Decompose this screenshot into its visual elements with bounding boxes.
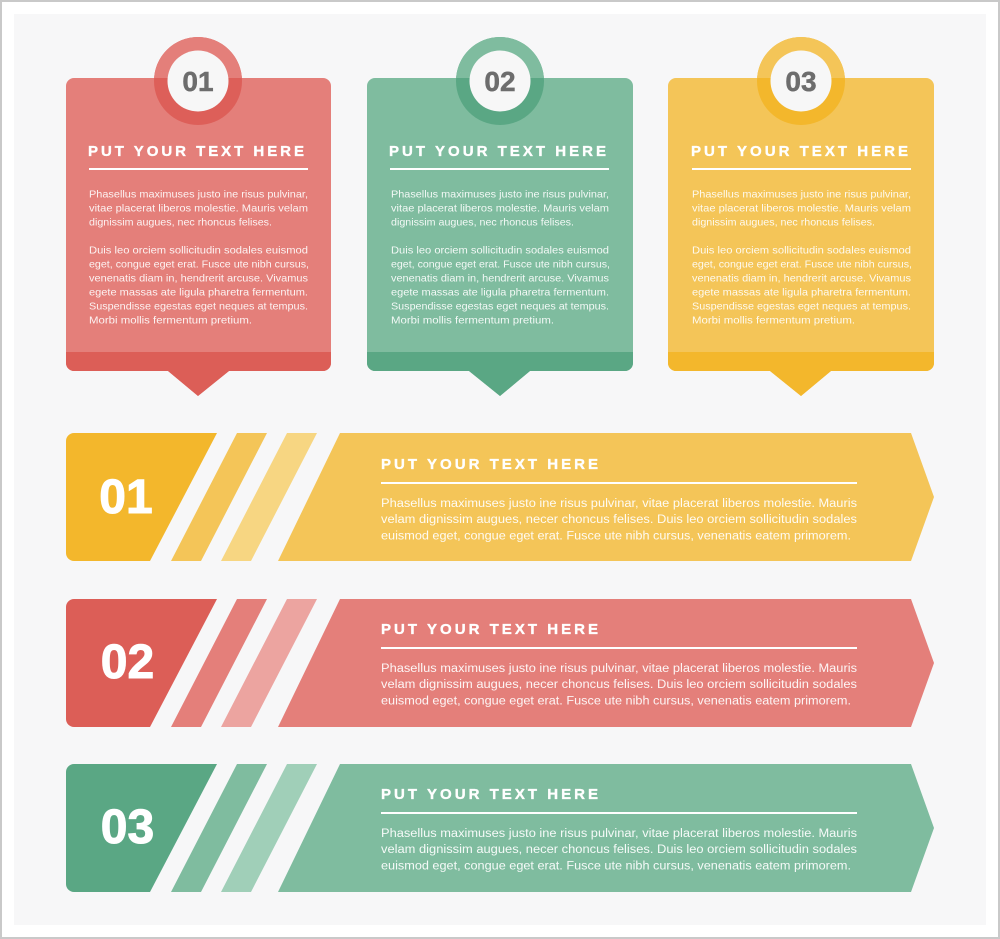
text block: card 01: Suspendisse egestas eget neques at tempus. [89,300,308,312]
panel: card 01 [66,37,331,396]
text block: card 02: venenatis diam in, hendrerit arcuse. Vivamus [391,272,609,284]
text block: card 02: eget, congue eget erat. Fusce ute nibh cursus, [391,258,610,270]
icon: number badge 03 [757,37,845,125]
text block: banner 01: Phasellus maximuses justo ine risus pulvinar, vitae placerat liberos molestie. Mauris [381,498,857,510]
text block: card 02: dignissim augues, nec rhoncus felises. [391,216,574,228]
heading: card 02: PUT YOUR TEXT HERE [389,143,606,160]
text block: banner 02: euismod eget, congue eget erat. Fusce ute nibh cursus, venenatis eatem primorem. [381,696,851,708]
slanted stripes 01 [171,433,317,561]
heading: banner 01: PUT YOUR TEXT HERE [381,456,598,473]
text block: card 03: venenatis diam in, hendrerit arcuse. Vivamus [692,272,911,284]
text block: card 02: vitae placerat liberos molestie. Mauris velam [391,202,609,214]
arrow 01 [278,433,934,561]
text block: card 02 [391,188,610,326]
slanted stripes 03 [171,764,317,892]
text block: banner 03: velam dignissim augues, necer choncus felises. Duis leo orciem sollicitudin sodales [381,844,857,856]
text block: card 01: Phasellus maximuses justo ine risus pulvinar, [89,188,308,200]
text block: card 01 [89,188,309,326]
number block 02 [66,599,217,727]
text block: card 01: venenatis diam in, hendrerit arcuse. Vivamus [89,272,308,284]
text block: card 03: eget, congue eget erat. Fusce ute nibh cursus, [692,258,912,270]
text block: card 01: Duis leo orciem sollicitudin sodales euismod [89,244,308,256]
text block: banner 02: velam dignissim augues, necer choncus felises. Duis leo orciem sollicitudin sodales [381,679,857,691]
text block: banner 03 [381,828,857,872]
text block: card 03: vitae placerat liberos molestie. Mauris velam [692,202,911,214]
icon: number badge 02 [456,37,544,125]
heading: banner 03: PUT YOUR TEXT HERE [381,786,598,803]
number block 03: 03 [101,801,154,854]
text block: banner 03: euismod eget, congue eget erat. Fusce ute nibh cursus, venenatis eatem primorem. [381,860,851,872]
panel: card 03 [668,37,934,396]
text block: card 01: vitae placerat liberos molestie. Mauris velam [89,202,308,214]
text block: card 03: Suspendisse egestas eget neques at tempus. [692,300,911,312]
text block: card 01: dignissim augues, nec rhoncus felises. [89,216,272,228]
panel: banner 02 [66,599,934,727]
text block: banner 01: velam dignissim augues, necer choncus felises. Duis leo orciem sollicitudin sodales [381,514,857,526]
text block: card 02: Duis leo orciem sollicitudin sodales euismod [391,244,609,256]
text block: card 03: Duis leo orciem sollicitudin sodales euismod [692,244,911,256]
icon: number badge 01: 01 [182,66,214,97]
number block 02: 02 [101,636,154,689]
text block: banner 02 [381,663,857,708]
text block: banner 03: Phasellus maximuses justo ine risus pulvinar, vitae placerat liberos molestie. Mauris [381,828,857,840]
icon: number badge 02: 02 [484,66,516,97]
icon: number badge 03: 03 [785,66,817,97]
arrow 03 [278,764,934,892]
text block: card 03: dignissim augues, nec rhoncus felises. [692,216,875,228]
text block: card 03 [692,188,912,326]
number block 01 [66,433,217,561]
text block: card 02: Suspendisse egestas eget neques at tempus. [391,300,609,312]
number block 01: 01 [99,471,153,524]
heading: card 03: PUT YOUR TEXT HERE [691,143,908,160]
text block: card 03: Phasellus maximuses justo ine risus pulvinar, [692,188,911,200]
panel: banner 01 [66,433,934,561]
icon: number badge 01 [154,37,242,125]
heading: card 01: PUT YOUR TEXT HERE [88,143,304,160]
text block: card 03: egete massas ate ligula pharetra fermentum. [692,286,911,298]
text block: card 03: Morbi mollis fermentum pretium. [692,314,855,326]
text block: card 01: egete massas ate ligula pharetra fermentum. [89,286,308,298]
text block: card 02: Phasellus maximuses justo ine risus pulvinar, [391,188,609,200]
arrow 02 [278,599,934,727]
slanted stripes 02 [171,599,317,727]
text block: card 02: egete massas ate ligula pharetra fermentum. [391,286,609,298]
panel: banner 03 [66,764,934,892]
panel: card 02 [367,37,633,396]
heading: banner 02: PUT YOUR TEXT HERE [381,621,598,638]
number block 03 [66,764,217,892]
text block: card 01: Morbi mollis fermentum pretium. [89,314,252,326]
text block: card 01: eget, congue eget erat. Fusce ute nibh cursus, [89,258,309,270]
text block: banner 01 [381,498,857,542]
text block: banner 01: euismod eget, congue eget erat. Fusce ute nibh cursus, venenatis eatem primorem. [381,530,851,542]
text block: card 02: Morbi mollis fermentum pretium. [391,314,554,326]
text block: banner 02: Phasellus maximuses justo ine risus pulvinar, vitae placerat liberos molestie. Mauris [381,663,857,675]
